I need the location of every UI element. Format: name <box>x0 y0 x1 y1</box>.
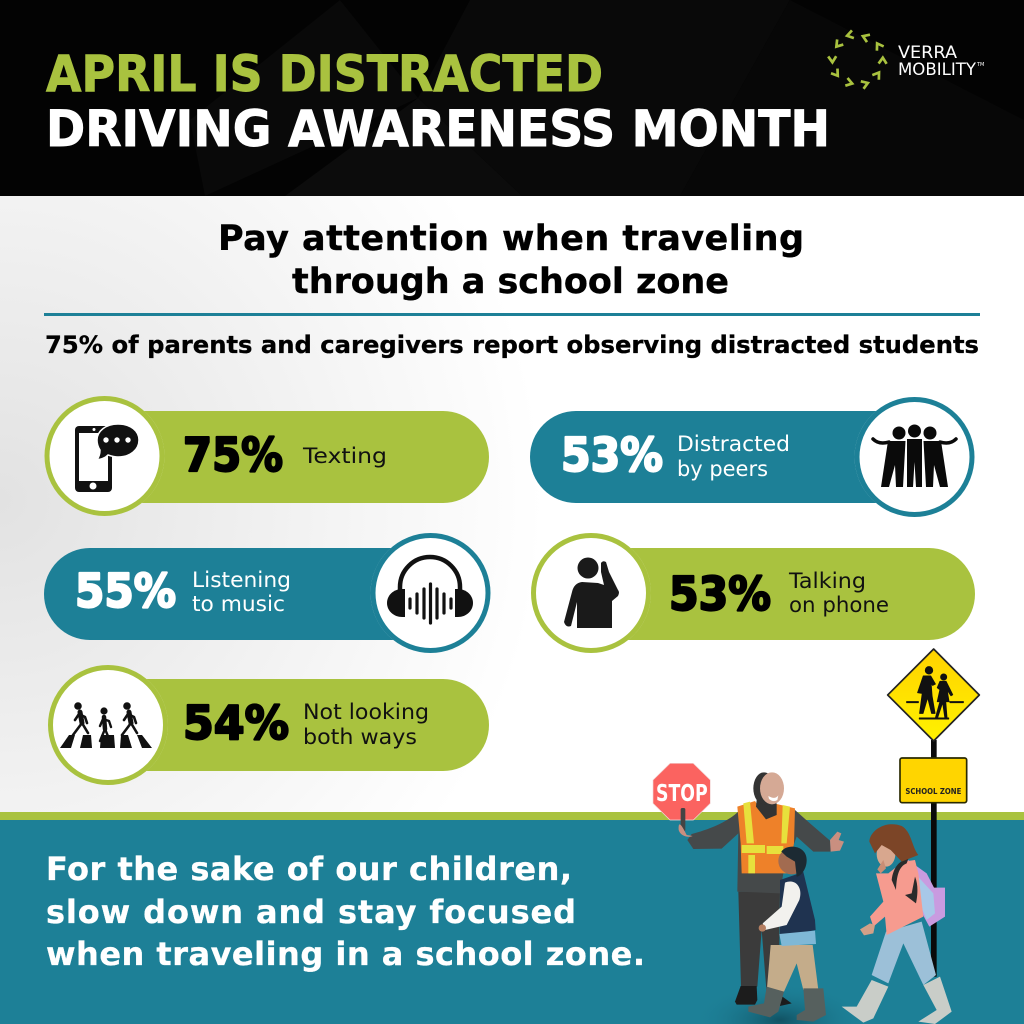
stat: talking on phone 53%: Talking <box>788 569 866 594</box>
stat: talking on phone 53%: on phone <box>789 593 889 618</box>
subheading: 75% of parents and caregivers report observing distracted students <box>45 331 979 359</box>
school zone scene <box>653 649 979 1024</box>
logo: Verra Mobility: VERRA <box>898 43 958 62</box>
stat: distracted by peers 53%: 53% <box>561 428 663 482</box>
heading: through a school zone <box>292 262 729 302</box>
stat: distracted by peers 53%: Distracted <box>677 432 790 457</box>
stat: texting 75%: 75% <box>183 428 283 482</box>
icon: pedestrians on crosswalk <box>60 702 152 748</box>
stat: talking on phone 53% <box>531 533 975 653</box>
stat: distracted by peers 53% <box>530 397 974 517</box>
stat: distracted by peers 53%: by peers <box>677 457 768 482</box>
title: APRIL IS DISTRACTED <box>46 45 603 103</box>
stat: listening to music 55%: to music <box>192 592 285 617</box>
stat: talking on phone 53%: 53% <box>669 567 771 621</box>
logo: Verra Mobility: TM <box>976 62 984 68</box>
logo: Verra Mobility: MOBILITY <box>898 60 977 79</box>
page background <box>0 196 1024 816</box>
stat: listening to music 55% <box>44 533 490 653</box>
school zone sign <box>888 649 979 977</box>
stat: not looking both ways 54%: Not looking <box>303 700 429 725</box>
girl <box>842 824 952 1024</box>
school zone sign: SCHOOL ZONE <box>905 786 962 796</box>
stat: not looking both ways 54%: 54% <box>183 696 289 750</box>
footer message: For the sake of our children, <box>46 850 572 888</box>
stop sign: STOP <box>656 779 708 807</box>
logo: Verra Mobility <box>828 30 984 89</box>
icon: person on phone <box>564 558 619 628</box>
title <box>46 45 830 158</box>
stop sign <box>653 763 710 831</box>
stat: texting 75%: Texting <box>302 444 387 469</box>
footer panel <box>0 812 1024 1024</box>
footer message: when traveling in a school zone. <box>46 935 645 973</box>
icon: headphones with sound wave <box>387 557 473 623</box>
icon: phone with speech bubble <box>75 424 139 492</box>
stat: texting 75% <box>44 396 489 516</box>
icon: three friends <box>873 424 956 487</box>
title: DRIVING AWARENESS MONTH <box>46 100 830 158</box>
stat: listening to music 55%: 55% <box>75 564 176 618</box>
stat: not looking both ways 54%: both ways <box>303 725 417 750</box>
heading: Pay attention when traveling <box>218 219 804 259</box>
footer message: slow down and stay focused <box>46 893 576 931</box>
boy <box>748 847 826 1022</box>
header band <box>0 0 1024 196</box>
footer message <box>46 850 645 973</box>
heading <box>218 219 804 302</box>
crossing guard <box>679 772 844 1006</box>
stat: not looking both ways 54% <box>48 665 489 785</box>
stat: listening to music 55%: Listening <box>192 568 291 593</box>
divider <box>44 313 980 316</box>
